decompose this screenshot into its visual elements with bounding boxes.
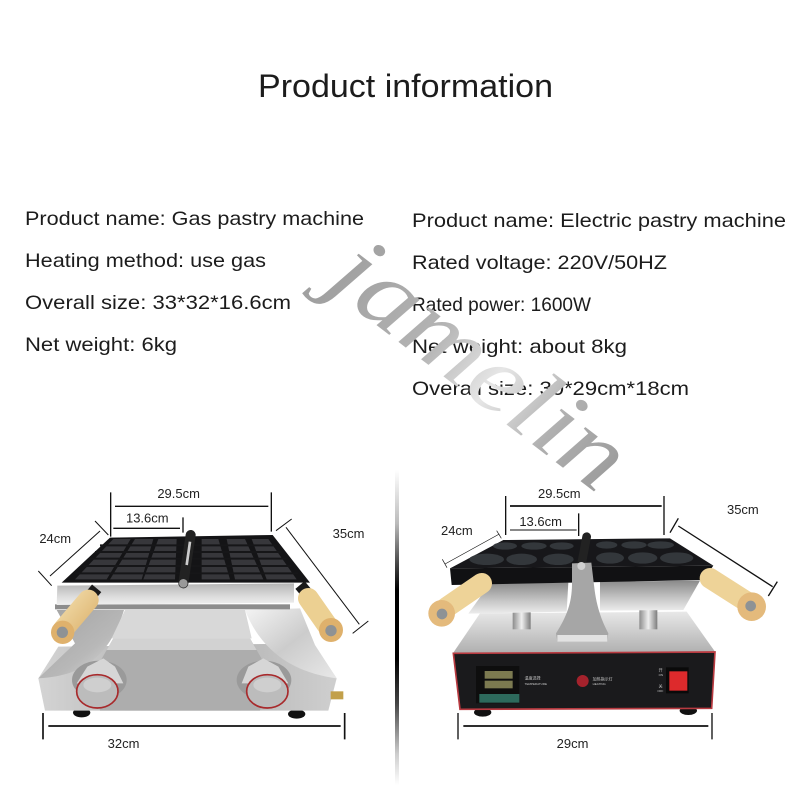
support posts [513, 610, 657, 629]
gas nozzle [331, 691, 343, 699]
panel labels: ON [659, 673, 663, 677]
hinge arm [556, 537, 608, 642]
gas knob: left [72, 658, 127, 708]
text block: gas machine specifications: Overall size: 33*32*16.6cm [25, 292, 291, 314]
dimension labels: 13.6cm [126, 511, 169, 526]
vertical divider strip [395, 470, 399, 785]
dimension labels: 35cm [727, 502, 759, 517]
hinge rod [179, 535, 191, 588]
dimension labels: 24cm [441, 523, 473, 538]
dimension labels: 29.5cm [538, 486, 581, 501]
dimension labels: 29cm [557, 736, 588, 751]
under-griddle plates [468, 581, 700, 614]
griddle plate [450, 538, 713, 585]
panel labels: TEMPERATURE [525, 682, 547, 686]
title: Product information [258, 68, 553, 104]
illustration: electric pastry machine with dimensions [428, 486, 777, 751]
text block: electric machine specifications: Overall size: 30*29cm*18cm [412, 378, 689, 400]
power switch [666, 667, 689, 693]
watermark: jamelin [301, 207, 652, 512]
machine feet [474, 706, 697, 717]
dimension labels: 13.6cm [519, 514, 562, 529]
panel labels: 温度选择 [525, 674, 541, 680]
text block: electric machine specifications: Rated voltage: 220V/50HZ [412, 252, 667, 274]
dimension lines [38, 492, 368, 739]
text block: electric machine specifications: Product name: Electric pastry machine [412, 210, 786, 232]
handle: left [51, 588, 97, 644]
panel labels: OFF [657, 689, 663, 693]
panel labels [525, 667, 663, 693]
text block: gas machine specifications: Heating method: use gas [25, 250, 266, 272]
text block: electric machine specifications: Net weight: about 8kg [412, 336, 627, 358]
text block: gas machine specifications: Net weight: 6kg [25, 334, 177, 356]
panel labels: HEATING [593, 682, 606, 686]
indicator light [577, 675, 589, 687]
handle: right [710, 578, 766, 621]
handle: right [300, 585, 343, 642]
text block: gas machine specifications [25, 208, 364, 356]
gas knob: right [237, 658, 291, 708]
dimension labels: 24cm [39, 531, 71, 546]
panel labels: 关 [659, 682, 663, 688]
dimension labels: 32cm [108, 736, 139, 751]
text block: electric machine specifications: Rated power: 1600W [412, 294, 592, 316]
handle: left [428, 583, 482, 627]
text block: electric machine specifications [412, 210, 786, 400]
dimension labels [441, 486, 759, 751]
illustration: gas pastry machine with dimensions [38, 486, 368, 751]
dimension labels: 35cm [333, 526, 364, 541]
machine base [38, 583, 337, 711]
machine feet [73, 708, 305, 719]
machine body top [453, 612, 715, 653]
panel labels: 开 [659, 667, 663, 672]
dimension labels: 29.5cm [157, 486, 200, 501]
dimension lines [442, 496, 777, 739]
text block: gas machine specifications: Product name: Gas pastry machine [25, 208, 364, 230]
temperature controller [476, 666, 519, 703]
dimension labels [39, 486, 364, 751]
griddle plate [62, 535, 310, 583]
control panel [453, 652, 715, 709]
panel labels: 加热指示灯 [593, 676, 613, 682]
